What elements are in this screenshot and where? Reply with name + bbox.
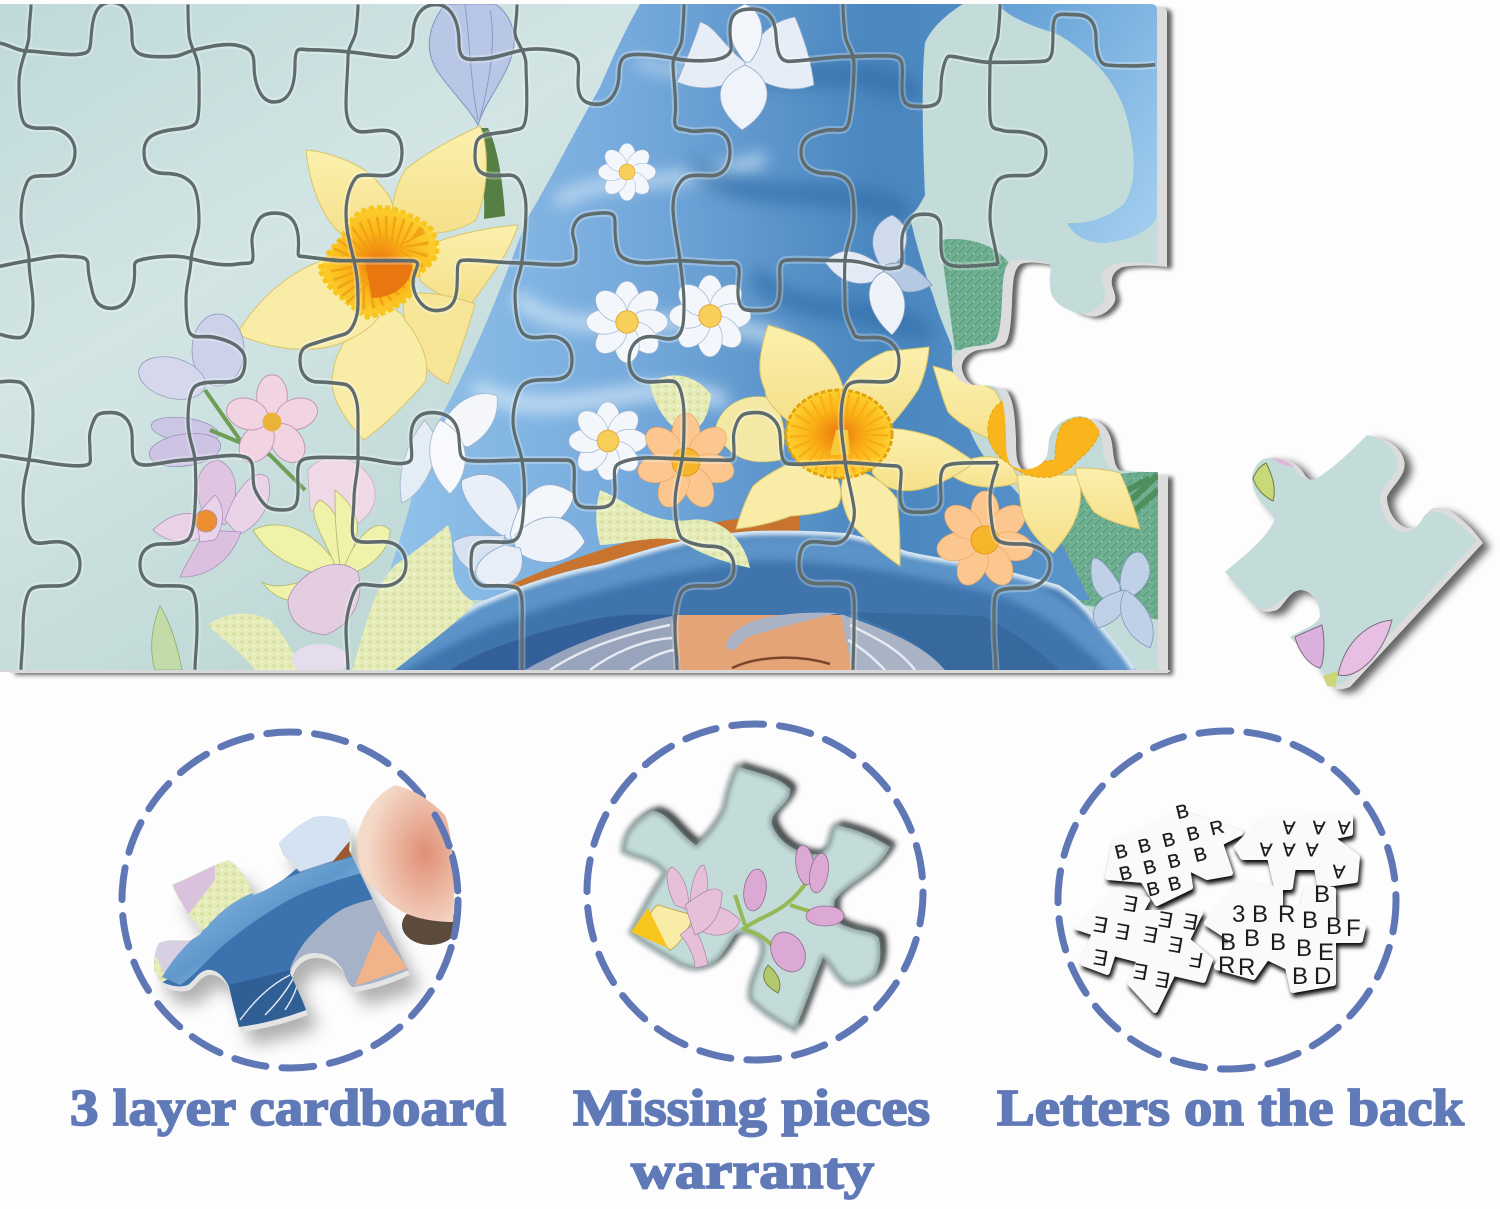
B letters lower: [1218, 881, 1361, 990]
B letters lower: F: [1346, 915, 1361, 942]
E letters: E: [1091, 911, 1110, 938]
B letters lower: B: [1326, 913, 1342, 940]
stems: [205, 390, 305, 490]
leaf in piece: [764, 965, 780, 993]
pink petals in piece: [667, 865, 740, 968]
B letters: B: [1174, 801, 1191, 824]
B letters: B: [1192, 844, 1209, 867]
daisy on hat: [598, 143, 656, 201]
B letters: B: [1141, 856, 1159, 880]
caption: missing pieces warranty: [573, 1080, 930, 1200]
daisy pair right: [669, 275, 751, 357]
yellow green flower: [253, 490, 390, 601]
E letters: E: [1091, 944, 1110, 971]
loose piece bud base: [1323, 671, 1338, 687]
lily top of hat: [677, 4, 814, 130]
B letters: [1106, 793, 1237, 907]
art: foliage: [150, 850, 262, 990]
B letters lower: B: [1314, 881, 1330, 908]
B letters lower: E: [1318, 939, 1334, 966]
B letters: B: [1113, 841, 1130, 864]
back piece lower with letter B: [1207, 881, 1363, 990]
B letters: B: [1117, 862, 1135, 886]
gnome hat: [380, 4, 1090, 600]
art: brim light: [162, 857, 362, 985]
art: pink flower: [170, 860, 215, 915]
jigsaw hole bevel: [623, 766, 890, 1030]
pale fern foliage: [208, 375, 750, 670]
E letters: E: [1181, 908, 1200, 935]
B letters: B: [1145, 878, 1162, 901]
E letters: E: [1131, 958, 1150, 985]
art: skin with eye: [355, 930, 408, 986]
daffodil right trumpet: [988, 400, 1099, 477]
caption: 3 layer cardboard: 3 layer cardboard: [70, 1080, 506, 1137]
E letters: [1091, 890, 1205, 993]
loose piece bud right: [1338, 620, 1392, 676]
art: blue lily: [270, 810, 352, 872]
peony: [288, 564, 360, 635]
E letters: E: [1156, 906, 1175, 933]
B letters lower: B: [1244, 925, 1260, 952]
art: pale lilac: [150, 935, 195, 975]
stem in piece: [735, 880, 812, 950]
A letters: A: [1281, 838, 1296, 860]
dashed circle: [1058, 731, 1396, 1069]
gnome hat tail: [983, 4, 1157, 243]
B letters: B: [1160, 829, 1178, 852]
artwork background: [0, 0, 1170, 672]
E letters: F: [1188, 946, 1205, 973]
leaf lower left: [152, 606, 182, 670]
caption: letters on the back: Letters on the back: [997, 1080, 1464, 1137]
loose piece face: [1225, 435, 1477, 684]
gnome face: [674, 615, 860, 670]
cardboard piece art: [150, 810, 420, 1030]
dashed circle: [587, 724, 923, 1060]
B letters lower: R: [1238, 954, 1255, 981]
eye line: [732, 658, 830, 668]
orange flower: [635, 413, 737, 512]
loose piece side: [1225, 435, 1483, 689]
grey hair right: [841, 614, 945, 670]
daffodil left: [237, 126, 518, 440]
daisy by band: [569, 402, 647, 480]
lily bottom left of hat: [453, 474, 585, 586]
daffodil right: [933, 366, 1140, 553]
E letters: E: [1113, 918, 1132, 945]
iris bud: [429, 4, 514, 125]
under brim right: [845, 612, 1059, 670]
B letters: B: [1166, 873, 1183, 896]
art: feathers: [240, 975, 298, 1020]
puzzle bottom highlight: [0, 670, 1170, 672]
back piece with letter A: [1237, 816, 1357, 887]
back piece with letter B: [1106, 793, 1240, 907]
puzzle cardboard side: [10, 7, 1168, 673]
B letters lower: R: [1278, 901, 1295, 928]
B letters: B: [1166, 850, 1183, 874]
puzzle edge shadow: [15, 9, 1173, 675]
B letters lower: B: [1292, 963, 1308, 990]
jigsaw hole shadow: [629, 762, 896, 1026]
art: dark blue feather gap: [229, 970, 308, 1030]
panel: missing pieces warranty: [587, 724, 923, 1060]
buds in piece: [741, 844, 844, 978]
cardboard piece side: [156, 821, 410, 1032]
panel: loose piece: [1225, 435, 1490, 693]
B letters: R: [1208, 817, 1226, 840]
dashed circle: [122, 732, 458, 1068]
orange hat band: [510, 516, 800, 590]
E letters: E: [1141, 921, 1160, 948]
grey hair left: [450, 614, 680, 670]
dashed circle front arc: [435, 815, 458, 945]
panel: 3 layer cardboard: [122, 732, 458, 1068]
loose piece pink tip: [1272, 458, 1295, 467]
pale yellow puff: [715, 397, 784, 462]
yellow trumpet in piece: [631, 908, 668, 948]
A letters: A: [1304, 838, 1319, 860]
B letters lower: B: [1252, 901, 1268, 928]
E letters: E: [1166, 931, 1185, 958]
daisy pair on hat: [586, 281, 668, 363]
back piece with letter E: [1077, 890, 1210, 1010]
hat brim: [395, 530, 1136, 670]
lilac bud: [134, 314, 244, 471]
lily right: [825, 215, 932, 335]
caption: missing pieces warranty: Missing pieces: [573, 1080, 930, 1137]
B letters: B: [1185, 823, 1202, 846]
pink flower: [226, 374, 318, 463]
pale peony bottom: [292, 644, 346, 670]
puzzle cut lines: [0, 2, 1155, 670]
art: brown band: [330, 838, 352, 865]
peony top: [308, 458, 375, 525]
E letters: E: [1153, 966, 1172, 993]
orange flower lower: [934, 491, 1036, 590]
thumb shadow: [402, 905, 458, 945]
daffodil left trumpet: [320, 207, 437, 317]
A letters: A: [1311, 816, 1326, 838]
crocus: [153, 460, 270, 577]
plain pale area behind hat tip: [952, 4, 1153, 311]
A letters: [1258, 816, 1351, 882]
daffodil stem: [480, 128, 505, 219]
B letters: B: [1136, 835, 1153, 858]
green foliage right of hat: [942, 239, 1158, 620]
E letters: E: [1121, 890, 1140, 917]
hair strands right: [848, 625, 915, 670]
A letters: A: [1331, 860, 1346, 882]
A letters: A: [1258, 838, 1273, 860]
B letters lower: R: [1218, 952, 1235, 979]
panel: letters on the back: [1058, 731, 1396, 1069]
loose piece bud left: [1295, 625, 1324, 668]
A letters: A: [1336, 816, 1351, 838]
yellow daffodil in piece: [645, 905, 692, 950]
B letters lower: D: [1314, 963, 1331, 990]
blue lily lower right: [1091, 552, 1153, 648]
loose piece green petal: [1253, 463, 1274, 501]
A letters: A: [1281, 816, 1296, 838]
B letters lower: B: [1270, 929, 1286, 956]
puzzle artwork: [0, 0, 1170, 684]
panel: main puzzle: [0, 0, 1173, 684]
eyebrow: [726, 613, 838, 650]
loose piece shadow: [1232, 439, 1490, 693]
hat white petals: [400, 394, 497, 503]
jigsaw hole: [623, 766, 890, 1030]
thumb: [357, 785, 454, 922]
art: grey hair: [290, 897, 420, 1012]
B letters lower: B: [1296, 935, 1312, 962]
B letters lower: 3: [1232, 901, 1245, 928]
B letters lower: B: [1302, 907, 1318, 934]
back pieces shadows: [1079, 817, 1365, 1014]
cardboard piece shadow: [166, 834, 420, 1045]
caption: missing pieces warranty: warranty: [631, 1143, 874, 1200]
daffodil centre: [736, 325, 975, 566]
daffodil centre trumpet: [786, 390, 892, 478]
B letters lower: B: [1220, 929, 1236, 956]
